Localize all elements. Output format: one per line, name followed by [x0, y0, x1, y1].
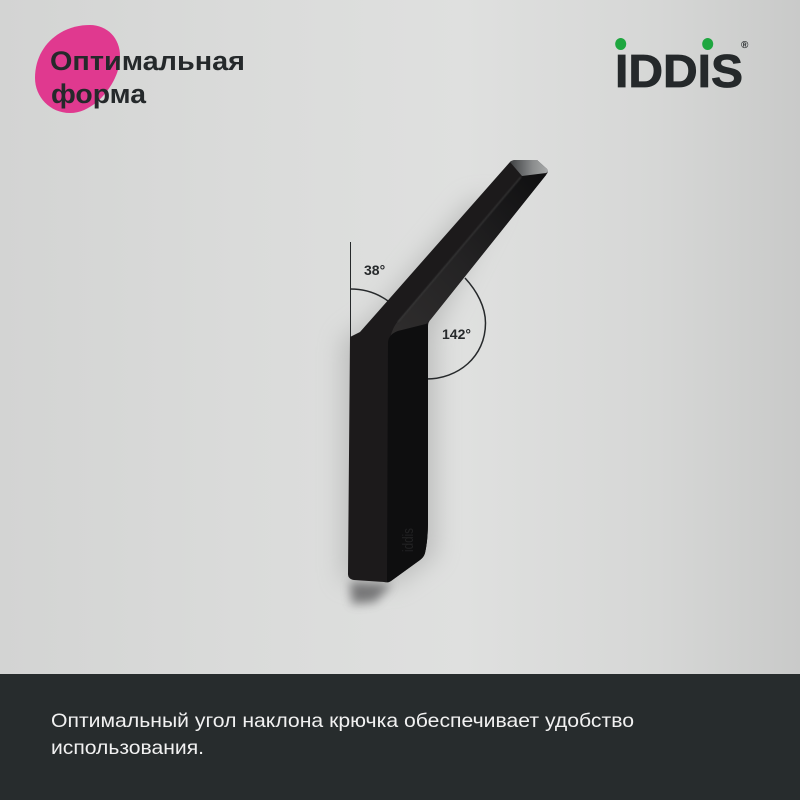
hook: polished tip [510, 160, 548, 176]
logo: IDDIS: ® [741, 40, 749, 51]
title [50, 46, 245, 109]
angle annotation: 142 degrees: 142° [442, 326, 471, 342]
footer text: использования. [51, 737, 204, 759]
title: Оптимальная [50, 46, 245, 76]
hook: arm edge highlight [398, 177, 521, 322]
angle annotation: 142 degrees [426, 278, 486, 379]
hook [348, 160, 548, 582]
footer text: Оптимальный угол наклона крючка обеспечивает удобство [51, 710, 634, 732]
hook: body silhouette [348, 160, 548, 582]
hook shadow [342, 200, 500, 604]
angle annotation: 38 degrees: 38° [364, 262, 385, 278]
footer text [51, 710, 634, 759]
angle annotation: 38 degrees [350, 242, 388, 338]
hook: underside of arm [390, 173, 546, 338]
hook: front lower face [387, 324, 428, 582]
badge: pink blob [35, 25, 120, 113]
title: форма [51, 79, 146, 109]
hook: engraved logo: iddis [400, 528, 417, 552]
logo: IDDIS: IDDIS [615, 45, 743, 97]
footer panel [0, 674, 800, 800]
